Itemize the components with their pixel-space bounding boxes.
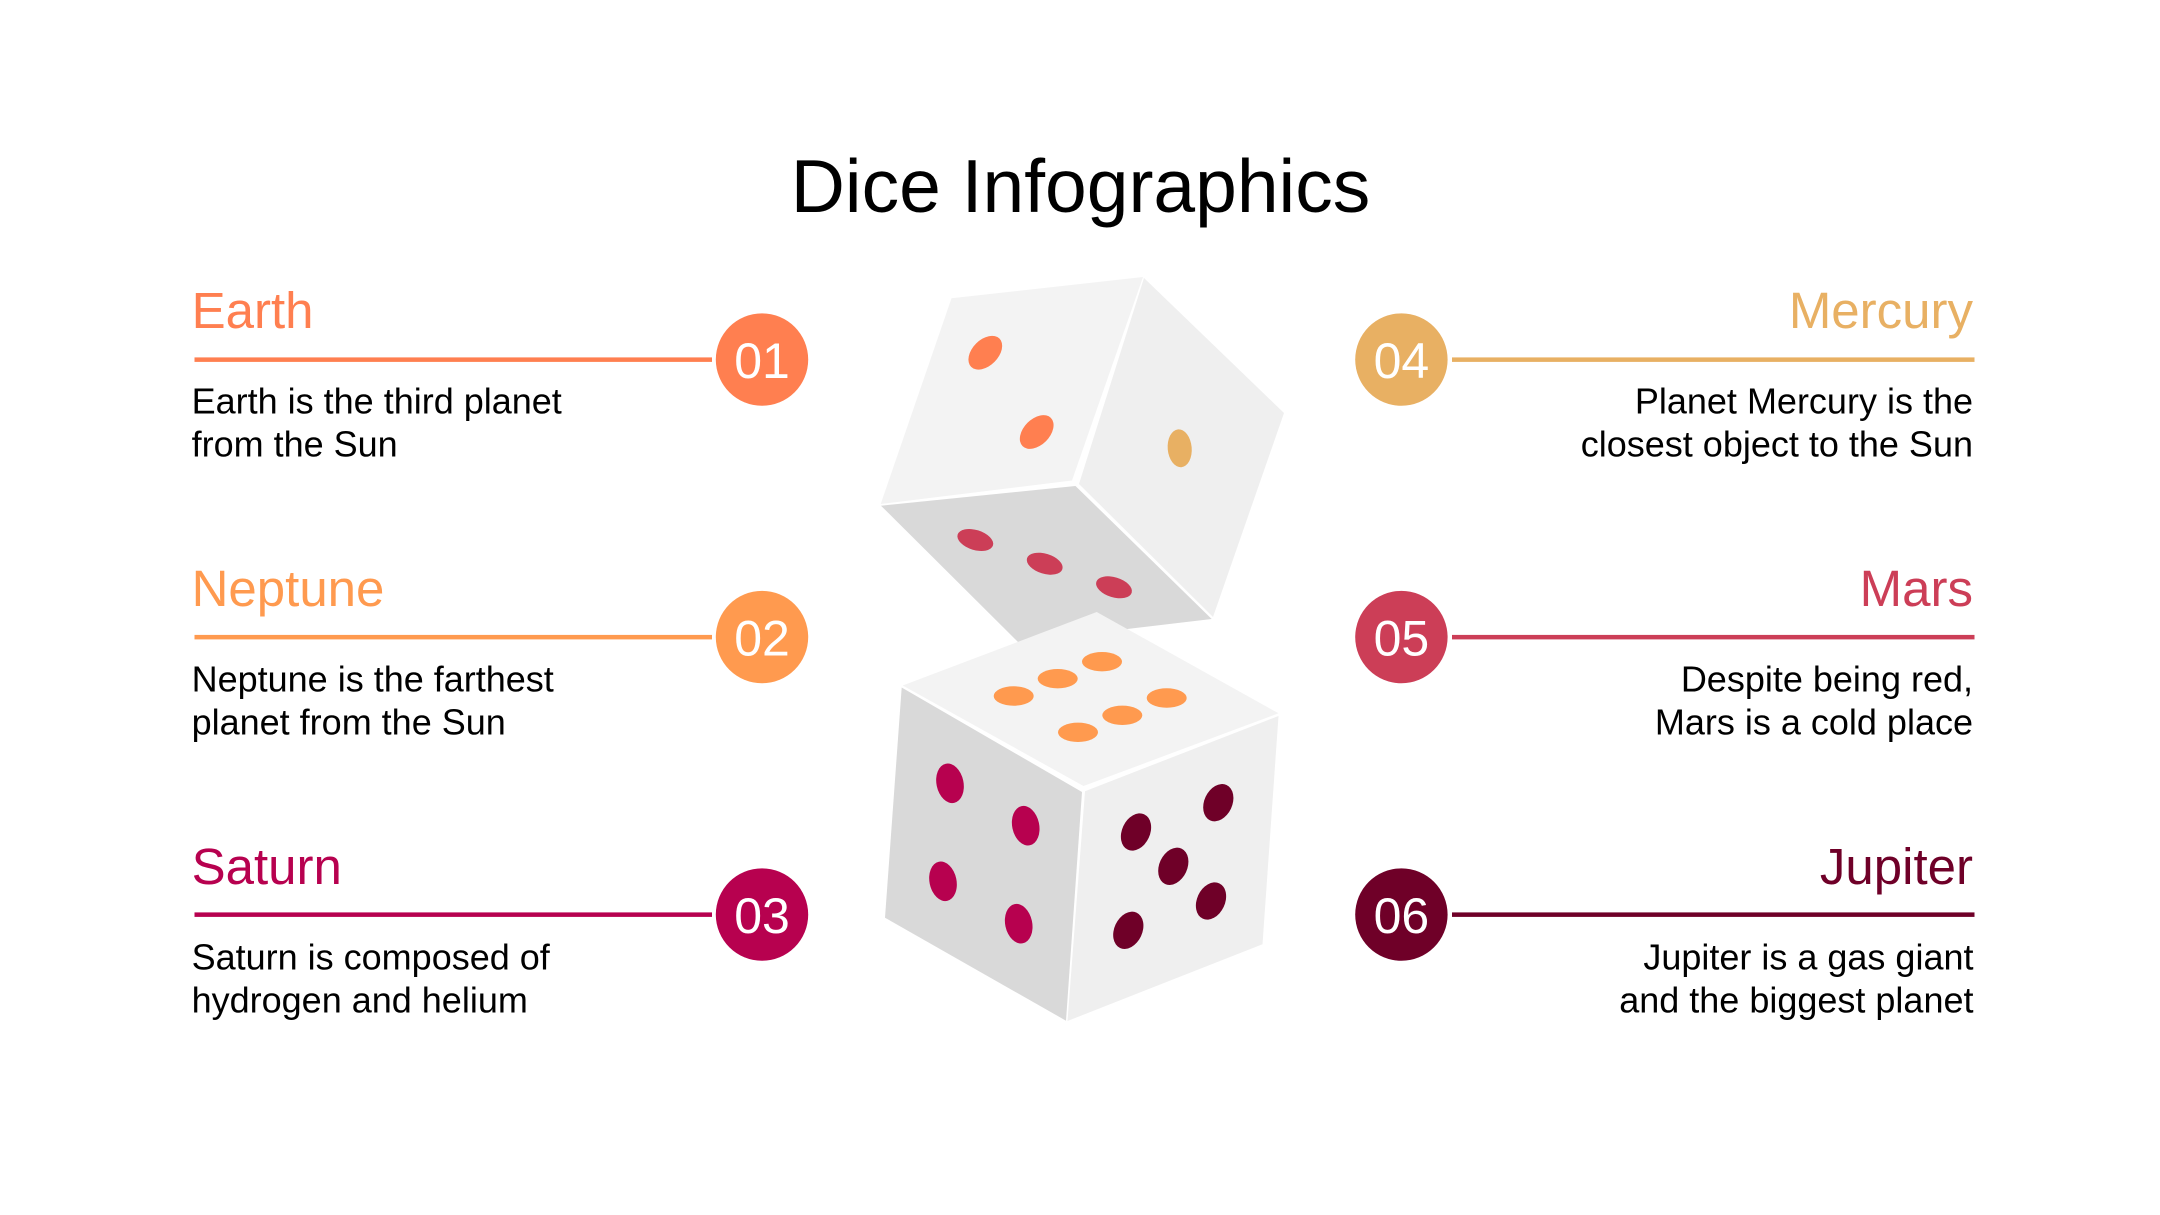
panel: Mercury: Planet Mercury is the: [1635, 380, 1973, 421]
panel: Jupiter: [1355, 838, 1974, 1020]
panel: Saturn: hydrogen and helium: [192, 979, 528, 1020]
panel: Saturn: Saturn is composed of: [192, 936, 551, 977]
panel: Neptune: planet from the Sun: [192, 701, 506, 742]
panel: Earth: 01: [734, 333, 790, 389]
panel: Mars: Despite being red,: [1681, 658, 1973, 699]
panel: Jupiter: 06: [1374, 888, 1429, 944]
panel: Neptune: 02: [734, 610, 790, 666]
panel: Mars: [1355, 560, 1974, 742]
panel: Earth: from the Sun: [192, 423, 398, 464]
title: Dice Infographics: [791, 144, 1370, 228]
panel: Mars: 05: [1374, 610, 1429, 666]
icon: bottom die: [885, 612, 1278, 1021]
panel: Mars: Mars: [1860, 560, 1973, 617]
panel: Neptune: Neptune is the farthest: [192, 658, 554, 699]
panel: Earth: Earth is the third planet: [192, 380, 562, 421]
panel: Jupiter: and the biggest planet: [1619, 979, 1974, 1020]
panel: Mars: Mars is a cold place: [1655, 701, 1973, 742]
panel: Jupiter: Jupiter is a gas giant: [1643, 936, 1974, 977]
panel: Mercury: Mercury: [1789, 282, 1973, 339]
icon: top die: [881, 277, 1284, 642]
panel: Mercury: [1355, 282, 1974, 464]
panel: Mercury: 04: [1374, 333, 1429, 389]
panel: Saturn: [192, 838, 808, 1020]
panel: Jupiter: Jupiter: [1820, 838, 1973, 895]
panel: Saturn: Saturn: [192, 838, 342, 895]
panel: Saturn: 03: [734, 888, 790, 944]
panel: Earth: [192, 282, 808, 464]
panel: Neptune: [192, 560, 808, 742]
panel: Mercury: closest object to the Sun: [1581, 423, 1973, 464]
panel: Neptune: Neptune: [192, 560, 384, 617]
panel: Earth: Earth: [192, 282, 314, 339]
